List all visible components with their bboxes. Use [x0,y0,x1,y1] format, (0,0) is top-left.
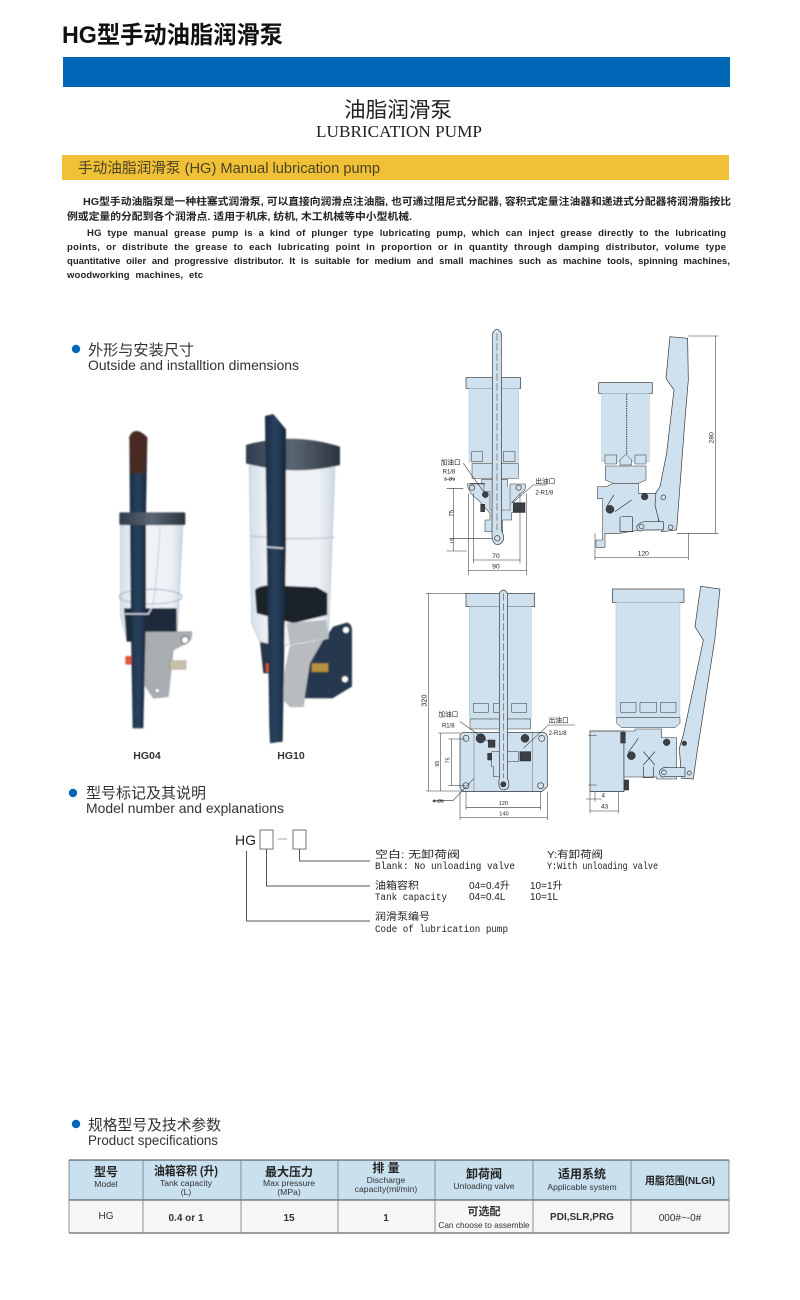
drawing: HG04 front view: 出油口 [535,477,555,486]
center heading: 油脂润滑泵 [344,99,452,122]
drawing: HG10 front view: 出油口 [549,716,569,725]
intro text: woodworking machines, etc [66,270,203,281]
intro text: HG type manual grease pump is a kind of plunger type lubricating pump, which can inject grease directly to the lubricating [87,228,726,239]
column: max pressure: 最大压力 [265,1164,313,1179]
drawing: HG10 front view: 120 [499,801,508,807]
drawing: HG04 side view: 280 [709,432,716,443]
column: tank capacity [154,1163,218,1224]
column: unloading valve: Can choose to assemble [438,1220,530,1230]
photo: HG04 pump [119,431,192,728]
intro text: 例或定量的分配到各个润滑点. 适用于机床, 纺机, 木工机械等中小型机械. [67,210,412,223]
blue banner [63,57,730,87]
drawing: HG04 front view: 90 [492,564,500,571]
option: tank capacity: 10=1升 [530,880,563,892]
drawing: HG04 side view: 120 [638,550,649,557]
drawing: HG04 front view: 15 [450,538,456,544]
option: unloading valve: Y:With unloading valve [547,861,658,873]
option: unloading valve: Blank: No unloading valve [375,861,515,873]
drawing: HG04 front view [441,329,555,575]
column: tank capacity: 油箱容积 (升) [154,1163,218,1178]
section heading: model number: 型号标记及其说明 [86,785,206,802]
drawing: HG10 front view: 320 [420,694,429,707]
section heading: specifications: Product specifications [88,1132,218,1148]
column: unloading valve: 卸荷阀 [466,1166,502,1181]
drawing: HG04 side view [595,336,718,560]
model code diagram: HG [235,832,256,848]
drawing: HG10 side view: 4 [602,793,606,800]
option: pump code [375,910,508,936]
specifications table [69,1160,729,1233]
column: discharge [355,1160,417,1224]
drawing: HG04 front view: 75 [450,509,456,517]
column: model: 型号 [94,1165,118,1179]
drawing: HG10 front view: 4-Ø9 [433,798,444,804]
section heading: dimensions: 外形与安装尺寸 [88,342,194,359]
drawing: HG10 front view [420,590,575,820]
drawing: HG04 front view: R1/8 [443,470,456,476]
column: model: HG [98,1211,114,1222]
column: discharge: Discharge [367,1175,406,1185]
option: tank capacity: 油箱容积 [375,879,419,892]
column: unloading valve: Unloading valve [453,1181,515,1191]
photo: HG10 pump [246,414,352,743]
section heading: specifications [72,1117,221,1148]
column: applicable system: PDI,SLR,PRG [550,1212,614,1223]
column: discharge: 排 量 [372,1160,400,1175]
label: HG04: HG04 [133,750,161,762]
title: HG型手动油脂润滑泵 [62,22,283,49]
column: applicable system: Applicable system [547,1182,617,1192]
option: tank capacity: 10=1L [530,892,559,903]
drawing: HG10 front view: 2-R1/8 [549,731,567,737]
drawing: HG10 front view: R1/8 [442,724,455,730]
column: discharge: 1 [383,1213,389,1224]
section heading: model number: Model number and explanations [86,800,284,816]
option: pump code: Code of lubrication pump [375,924,508,936]
column: max pressure: Max pressure [263,1178,315,1188]
model code diagram [235,830,658,936]
option: unloading valve: 空白: 无卸荷阀 [375,848,460,861]
column: tank capacity: 0.4 or 1 [168,1213,204,1224]
intro text: points, or distribute the grease to each lubricating point in proportion or in quantity through damping distributor, volume type [67,242,726,253]
drawing: HG04 front view: 3-Ø9 [444,477,455,483]
column: tank capacity: Tank capacity [160,1178,213,1188]
option: unloading valve [375,848,658,873]
center heading [316,99,482,141]
option: tank capacity: Tank capacity [375,892,447,904]
drawing: HG10 side view: 43 [601,803,609,810]
drawing: HG10 side view [586,586,720,813]
column: applicable system [547,1166,617,1223]
column: grease range: 000#~-0# [659,1213,702,1224]
intro text: quantitative oiler and progressive distributor. It is suitable for medium and small machines such as machine tools, spinning machines, [67,256,730,267]
drawing: HG10 front view: 140 [499,812,509,818]
column: applicable system: 适用系统 [558,1166,606,1181]
column: model [94,1165,118,1222]
yellow section bar: 手动油脂润滑泵 (HG) Manual lubrication pump [78,160,380,177]
column: unloading valve [438,1166,530,1230]
column: unloading valve: 可选配 [468,1204,500,1218]
column: max pressure: 15 [283,1213,295,1224]
label: HG10: HG10 [277,750,305,762]
column: tank capacity: (L) [181,1187,191,1197]
section heading: model number [69,785,284,816]
column: max pressure [263,1164,315,1224]
section heading: dimensions [72,342,299,373]
option: tank capacity: 04=0.4升 [469,880,510,892]
option: unloading valve: Y:有卸荷阀 [547,848,603,861]
drawing: HG04 front view: 70 [492,553,500,560]
drawing: HG10 front view: 加油口 [438,710,458,719]
option: tank capacity: 04=0.4L [469,892,506,903]
section heading: specifications: 规格型号及技术参数 [88,1117,221,1134]
option: tank capacity [375,879,563,904]
section heading: dimensions: Outside and installtion dimensions [88,357,299,373]
center heading: LUBRICATION PUMP [316,122,482,141]
drawing: HG10 front view: 95 [435,761,441,767]
drawing: HG10 front view: 75 [446,757,452,763]
column: discharge: capacity(ml/min) [355,1184,417,1194]
option: pump code: 润滑泵编号 [375,910,430,923]
column: grease range [645,1174,715,1224]
column: max pressure: (MPa) [277,1187,301,1197]
drawing: HG04 front view: 2-R1/8 [535,491,554,497]
column: grease range: 用脂范围(NLGI) [645,1174,715,1187]
intro text [66,195,731,281]
yellow section bar [62,155,729,180]
intro text: HG型手动油脂泵是一种柱塞式润滑泵, 可以直接向润滑点注油脂, 也可通过阻尼式分配器, 容积式定量注油器和递进式分配器将润滑脂按比 [83,195,731,208]
column: model: Model [94,1179,118,1189]
drawing: HG04 front view: 加油口 [441,457,461,466]
